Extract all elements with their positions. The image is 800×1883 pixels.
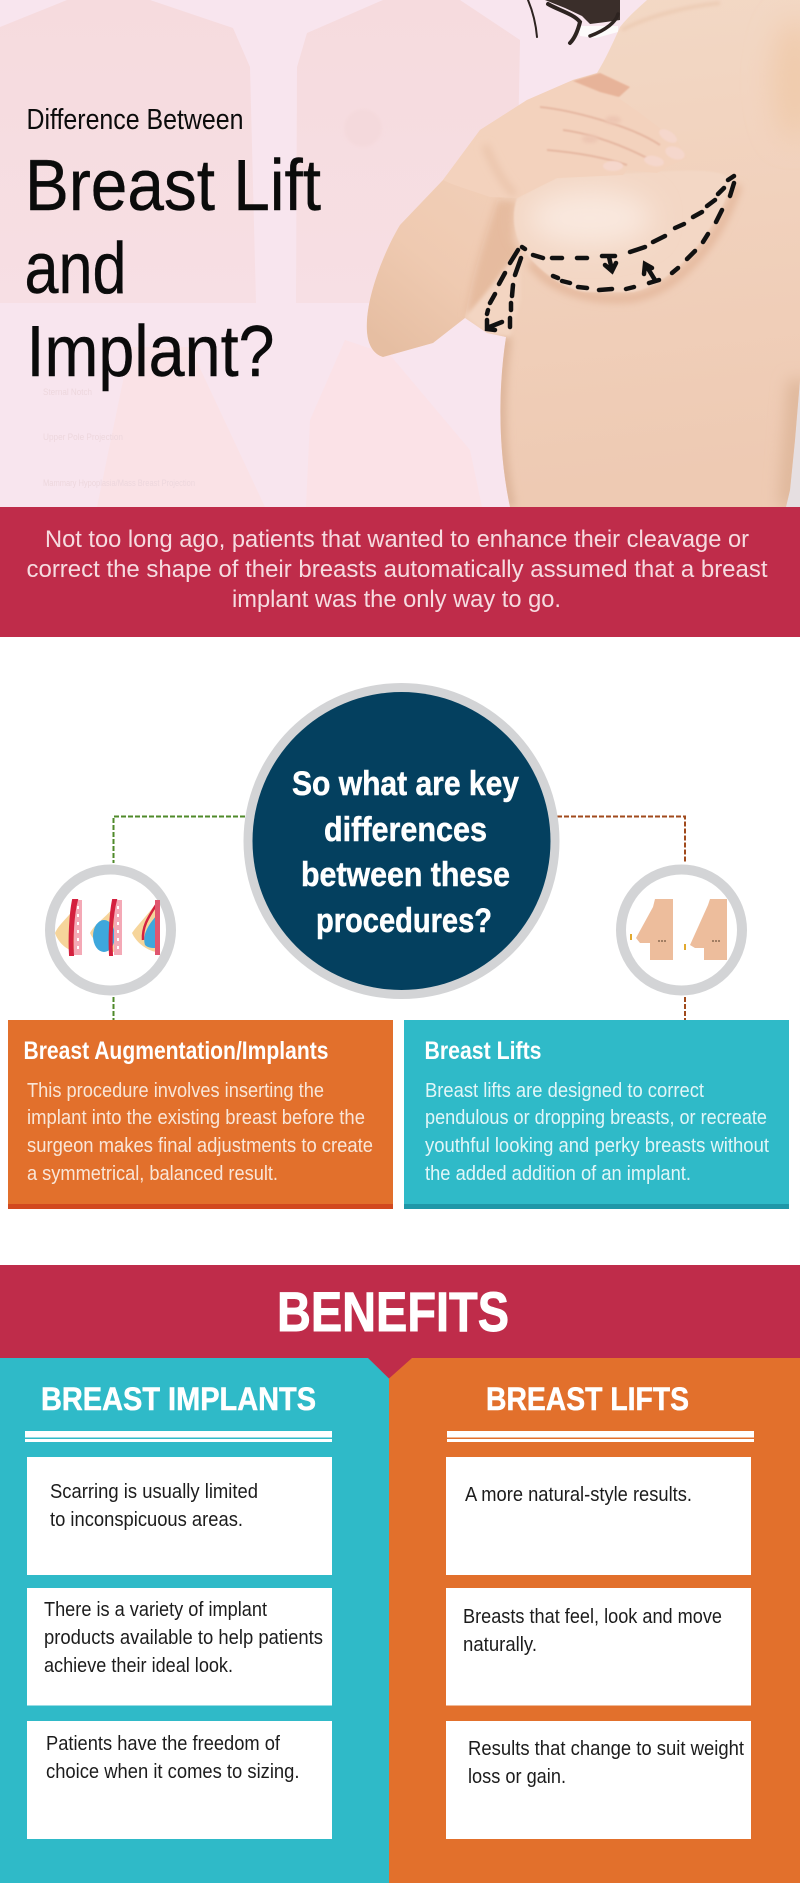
card heading: Breast Lifts [424,1037,542,1065]
surgical dashed lines [487,176,734,330]
finger separations [540,107,660,165]
benefit box 3: Patients have the freedom of [46,1733,280,1755]
benefit box 1: Scarring is usually limited [50,1481,258,1503]
faint background labels: Sternal Notch [43,387,92,397]
corner backdrop [780,380,800,507]
panel: breast lifts card [404,1020,789,1209]
card text: youthful looking and perky breasts without [425,1135,769,1157]
intro text: correct the shape of their breasts automatically assumed that a breast [26,556,768,583]
card text: pendulous or dropping breasts, or recreate [425,1107,767,1129]
benefit box 2 [27,1588,332,1706]
intro text [26,526,768,613]
knuckle shading [582,116,621,143]
underarm shadow [466,200,520,316]
benefit box 2: products available to help patients [44,1627,323,1649]
benefit box 3: loss or gain. [468,1766,566,1788]
card text: This procedure involves inserting the [27,1080,324,1102]
forearm [366,180,478,357]
faint background labels [43,387,195,488]
title line 1: Breast Lift [25,146,321,226]
column heading: BREAST LIFTS [486,1381,689,1417]
intro text: Not too long ago, patients that wanted to enhance their cleavage or [45,526,749,553]
breast highlight [528,190,652,246]
body [360,0,800,507]
hand shading [485,145,515,195]
breast [514,170,733,292]
title line 3: Implant? [26,312,274,392]
central question: procedures? [316,902,492,940]
faint background labels: Upper Pole Projection [43,432,123,442]
central question: differences [324,811,487,849]
benefit box 2: Breasts that feel, look and move [463,1606,722,1628]
column heading: BREAST IMPLANTS [41,1381,316,1417]
icon: breast lift diagrams [621,870,742,990]
icon 3 implant under muscle [132,900,160,955]
icon 1 natural breast [55,900,82,955]
central circle [244,683,560,999]
faint background silhouettes [0,0,520,507]
benefit box 2: naturally. [463,1634,537,1656]
neck crease [622,3,720,30]
connector: brown dashed [550,816,685,1020]
benefits banner [0,1265,800,1378]
benefit box 1: A more natural-style results. [465,1484,692,1506]
icon 1 before lift [631,899,673,960]
side of breast [466,250,520,336]
connector: green dashed [114,816,252,1020]
card text [27,1080,373,1185]
benefit box 3 [27,1721,332,1839]
benefit box 1 [446,1457,751,1575]
benefit box 2: There is a variety of implant [44,1599,267,1621]
benefit box 1: to inconspicuous areas. [50,1509,243,1531]
finger nails [603,126,686,171]
hand [443,73,687,198]
card heading: Breast Augmentation/Implants [24,1037,328,1065]
benefits heading: BENEFITS [277,1280,509,1343]
card text [425,1080,769,1185]
benefit box 3: Results that change to suit weight [468,1738,744,1760]
top finger [573,73,630,97]
card text: Breast lifts are designed to correct [425,1080,704,1102]
central question: between these [301,856,510,894]
benefit box 3 [446,1721,751,1839]
panel: hero [0,0,800,507]
panel: intro banner [0,507,800,637]
card text: the added addition of an implant. [425,1163,691,1185]
panel: breast implants benefits [0,1358,389,1883]
double rule [447,1431,754,1442]
icon 2 after lift [685,899,727,960]
breast crease shadow [530,185,738,299]
card text: surgeon makes final adjustments to create [27,1135,373,1157]
title kicker: Difference Between [26,104,244,136]
title [24,104,321,392]
panel: breast augmentation card [8,1020,393,1209]
torso right glow [773,20,800,140]
card text: a symmetrical, balanced result. [27,1163,278,1185]
hair [528,0,620,43]
torso edge shading [500,337,510,507]
card text: implant into the existing breast before the [27,1107,365,1129]
double rule [25,1431,332,1442]
central question: So what are key [292,765,519,803]
benefit box 2 [446,1588,751,1706]
benefit box 3: choice when it comes to sizing. [46,1761,300,1783]
icon 2 implant under tissue [90,900,122,955]
icon: implant diagrams [50,870,171,990]
benefit box 1 [27,1457,332,1575]
benefit box 2: achieve their ideal look. [44,1655,233,1677]
title line 2: and [24,229,126,309]
faint background labels: Mammary Hypoplasia/Mass Breast Projection [43,478,195,488]
arrow marks [602,256,616,271]
panel: breast lifts benefits [389,1358,800,1883]
central question [292,765,519,940]
intro text: implant was the only way to go. [232,586,561,613]
